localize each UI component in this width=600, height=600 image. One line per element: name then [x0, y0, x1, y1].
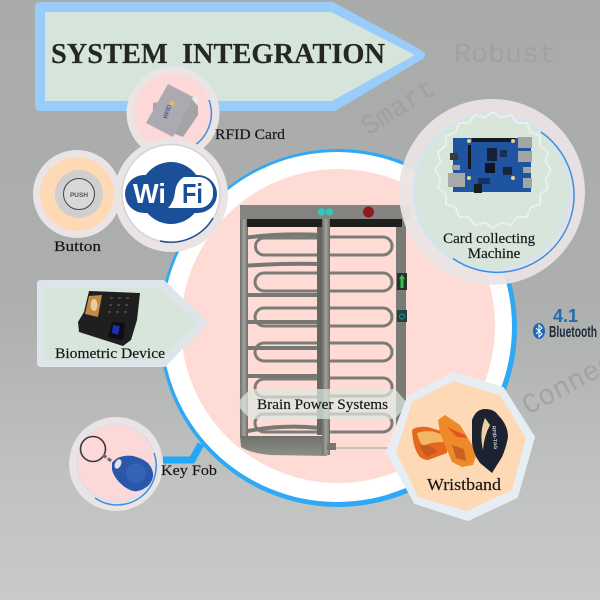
- icon: wifi logo: [125, 162, 217, 224]
- icon: RFID cards: RFID: [163, 104, 173, 120]
- title banner: [35, 2, 425, 111]
- left post: [240, 219, 248, 437]
- icon: push button: PUSH: [70, 192, 88, 199]
- label: RFID Card: RFID Card: [215, 127, 286, 143]
- biometric device panel: [37, 280, 208, 367]
- icon: key fob: [80, 436, 153, 491]
- RFID card badge: [126, 66, 286, 160]
- label: Key Fob: Key Fob: [161, 463, 217, 479]
- label: Button: Button: [54, 239, 102, 255]
- label: Biometric Device: Biometric Device: [55, 346, 165, 362]
- icon: wifi logo: Wi: [133, 178, 166, 209]
- label: Card collecting Machine: Machine: [468, 246, 521, 262]
- right post: [396, 219, 406, 445]
- card collecting machine badge: [399, 99, 585, 285]
- icon: wifi logo: Fi: [182, 178, 203, 209]
- rotor arms: [243, 234, 322, 432]
- brain power systems arrow: [236, 389, 408, 419]
- icon: black wristband: RFID-TAG: [490, 426, 498, 450]
- label: Wristband: Wristband: [427, 475, 502, 494]
- icon: biometric terminal: [78, 291, 140, 346]
- top bar: [240, 205, 410, 219]
- icon: RFID cards: [146, 84, 198, 137]
- base plate: [240, 436, 327, 456]
- bluetooth badge: [533, 306, 597, 341]
- base foot: [327, 443, 336, 450]
- icon: orange wristband left: [412, 427, 448, 460]
- bluetooth badge: 4.1: [553, 306, 578, 326]
- indicator lights: [318, 206, 374, 218]
- left gate loops: [255, 238, 322, 432]
- floor shadow: [336, 447, 388, 449]
- button badge: [33, 150, 121, 255]
- watermark: Smart: Smart: [356, 74, 442, 144]
- brain power systems arrow: Brain Power Systems: [257, 397, 388, 413]
- green arrow display: [397, 273, 407, 290]
- key fob badge: [69, 417, 217, 511]
- icon: black wristband: [472, 409, 508, 473]
- centre post: [322, 219, 330, 455]
- sunburst frame: [435, 112, 551, 228]
- turnstile: [240, 205, 410, 456]
- wristband badge: [387, 373, 534, 520]
- watermark: Robust: Robust: [454, 40, 556, 71]
- central circle: [159, 149, 517, 507]
- inner rotor post: [317, 227, 323, 435]
- label: Card collecting Machine: Card collecting: [443, 231, 536, 247]
- icon: circuit board: [448, 137, 532, 193]
- connector to key fob: [163, 444, 201, 460]
- title banner: SYSTEM INTEGRATION: [51, 39, 385, 70]
- wifi badge: [114, 138, 228, 252]
- icon: orange wristband middle: [438, 415, 477, 467]
- black header: [247, 219, 402, 227]
- right gate loops: [330, 237, 392, 432]
- sensor: [397, 310, 407, 322]
